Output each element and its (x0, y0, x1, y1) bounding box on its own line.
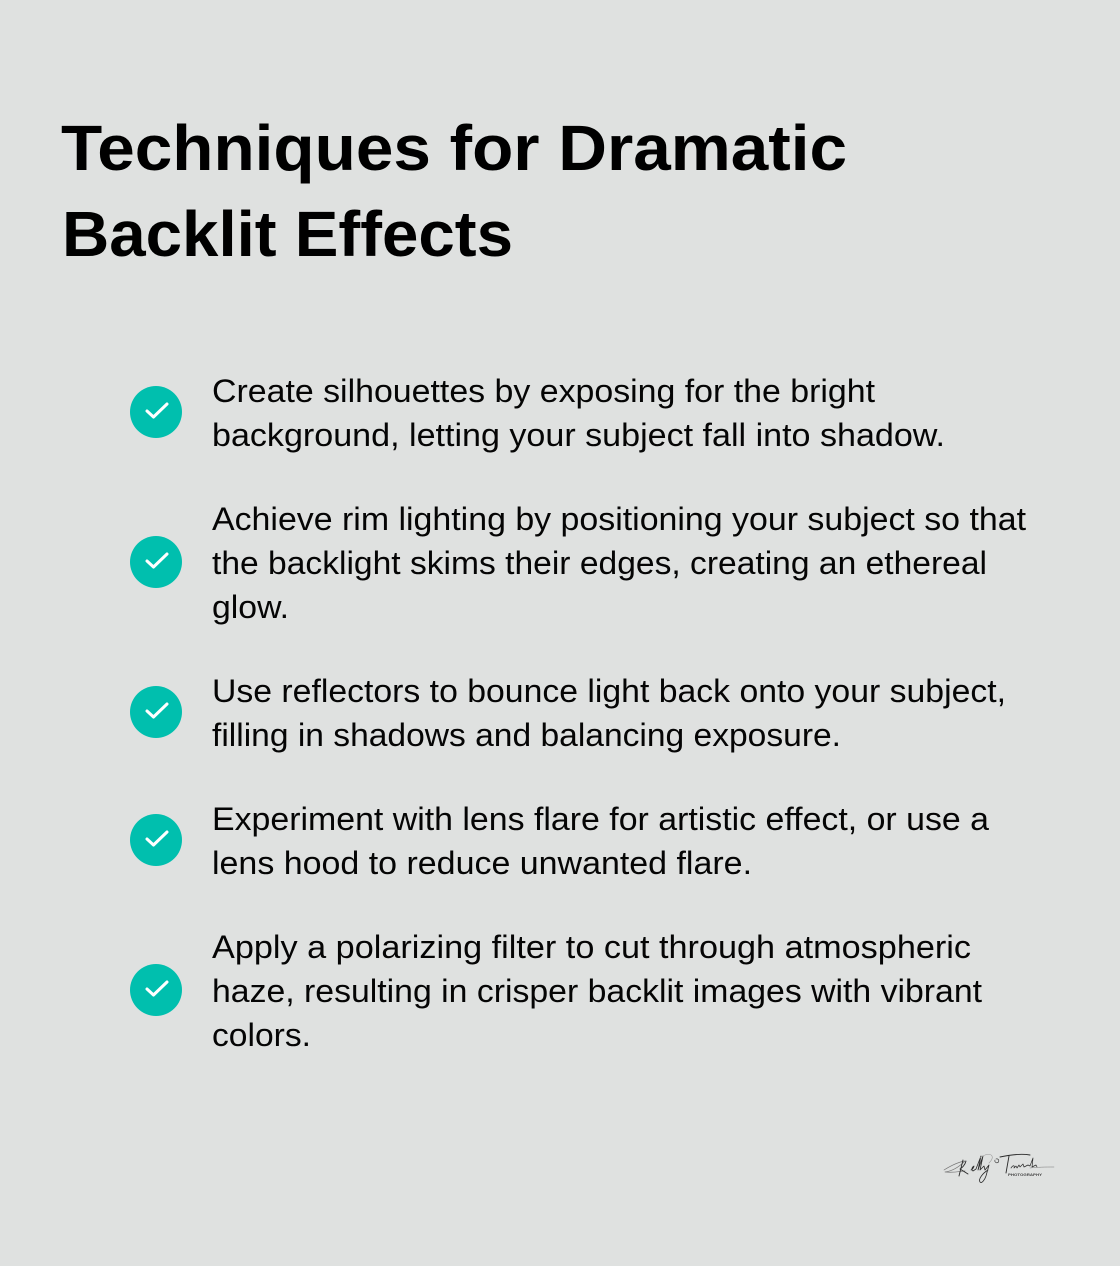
title: Techniques for Dramatic (61, 112, 847, 184)
text: silhouettes (212, 373, 945, 453)
text: rim lighting: Achieve rim lighting by positioning your subject so that (212, 501, 1026, 537)
icon: check circle 2 (130, 536, 182, 588)
icon: check circle 3 (130, 686, 182, 738)
list item 2 (130, 501, 1026, 625)
text: rim lighting: glow. (212, 589, 289, 625)
title (61, 112, 847, 270)
text: polarizing filter: haze, resulting in crisper backlit images with vibrant (212, 973, 982, 1009)
icon: check circle 4 (130, 814, 182, 866)
icon: check circle 1 (130, 386, 182, 438)
list item 3 (130, 673, 1006, 753)
text: polarizing filter: Apply a polarizing filter to cut through atmospheric (212, 929, 971, 965)
list item 4 (130, 801, 989, 881)
text: rim lighting (212, 501, 1026, 625)
icon: check circle 5 (130, 964, 182, 1016)
text: reflectors: Use reflectors to bounce light back onto your subject, (212, 673, 1006, 709)
text: lens flare: lens hood to reduce unwanted flare. (212, 845, 752, 881)
text: lens flare: Experiment with lens flare for artistic effect, or use a (212, 801, 989, 837)
text: rim lighting: the backlight skims their edges, creating an ethereal (212, 545, 987, 581)
text: silhouettes: Create silhouettes by exposing for the bright (212, 373, 875, 409)
text: lens flare (212, 801, 989, 881)
logo wordmark: PHOTOGRAPHY (1008, 1173, 1043, 1177)
text: polarizing filter: colors. (212, 1017, 311, 1053)
list item 5 (130, 929, 982, 1053)
text: silhouettes: background, letting your subject fall into shadow. (212, 417, 945, 453)
text: reflectors: filling in shadows and balancing exposure. (212, 717, 841, 753)
list item 1 (130, 373, 945, 453)
text: polarizing filter (212, 929, 982, 1053)
signature logo (944, 1154, 1054, 1182)
text: reflectors (212, 673, 1006, 753)
title: Backlit Effects (62, 198, 513, 270)
